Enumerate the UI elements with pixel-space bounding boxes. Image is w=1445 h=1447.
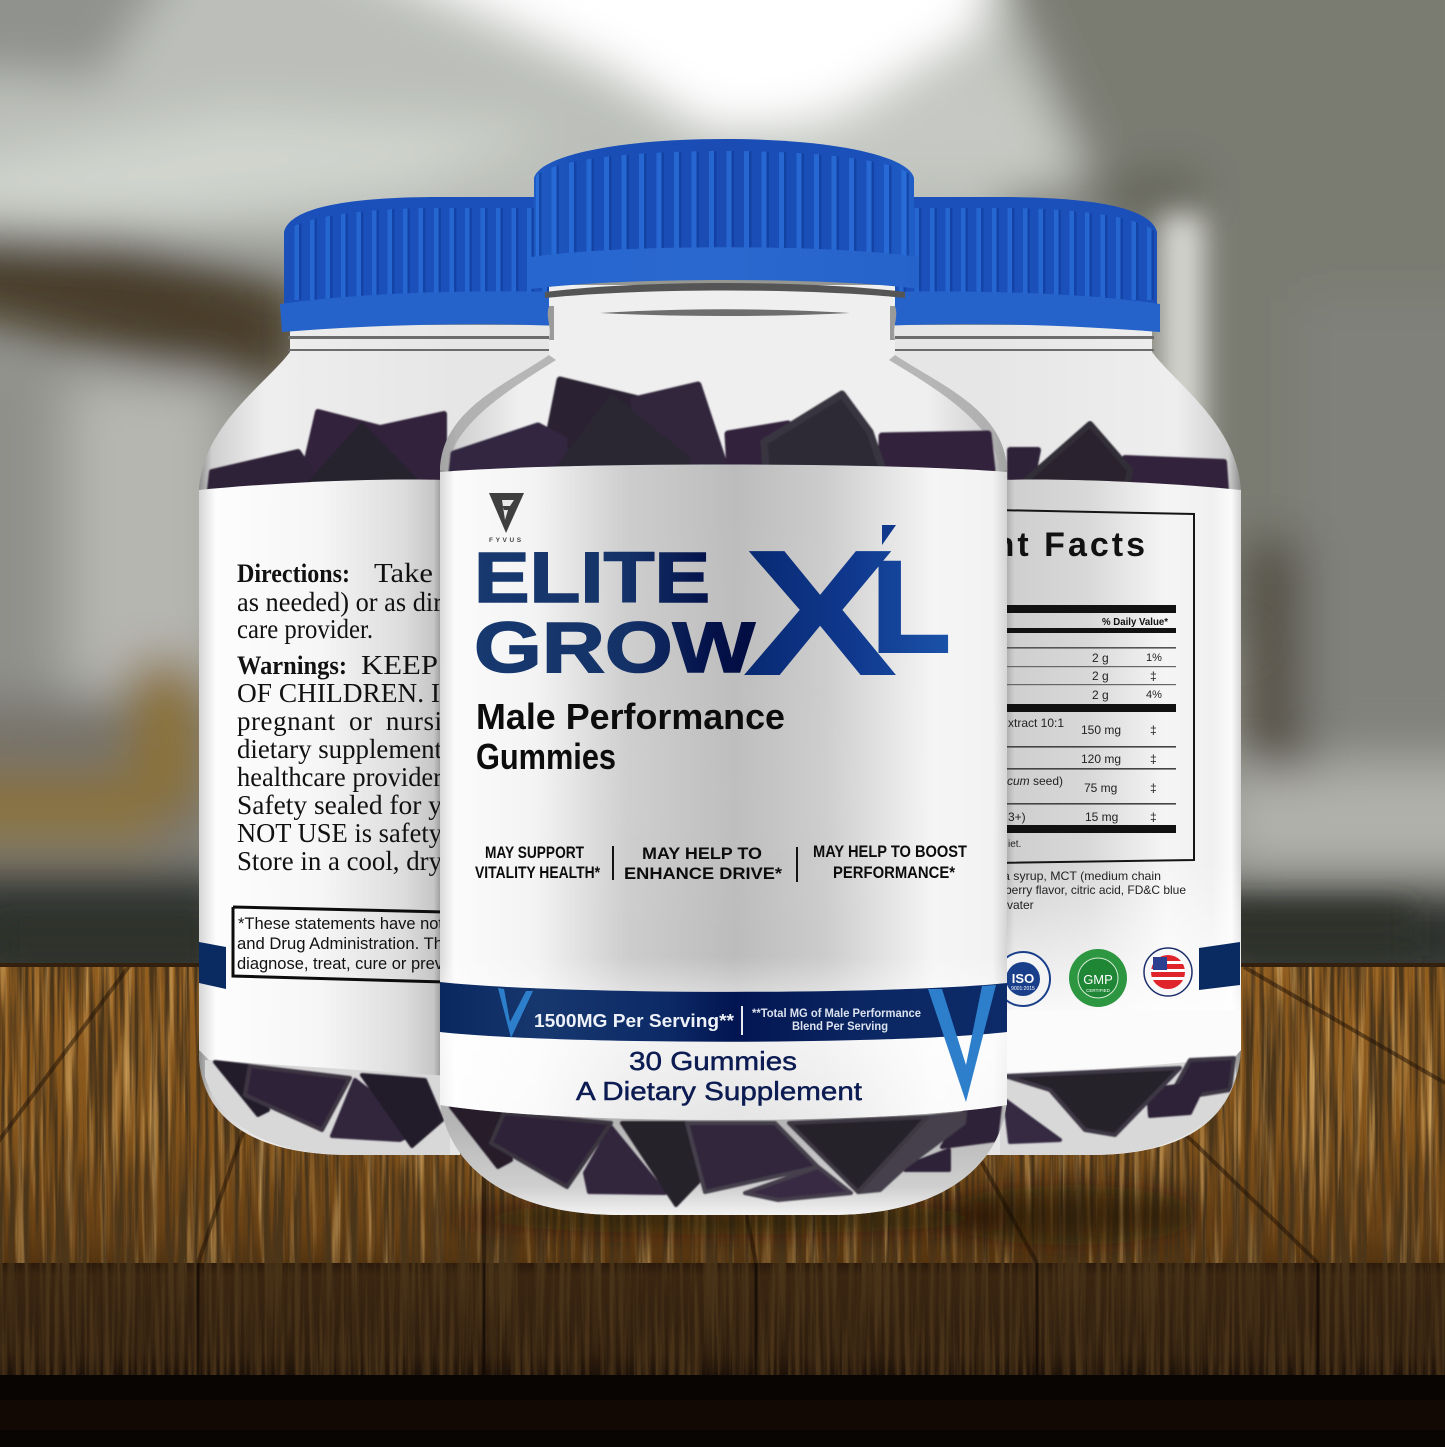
cap body with ribs [534, 139, 914, 262]
brand logo: FYVUS [489, 493, 524, 544]
left bottle label [199, 479, 445, 1078]
FDA disclaimer box [233, 907, 445, 982]
supplement facts panel: ‡ [1150, 669, 1157, 683]
FDA disclaimer box: and Drug Administration. Th [237, 934, 443, 953]
supplement facts panel: 2 g [1092, 651, 1109, 665]
supplement facts panel: ‡ [1150, 781, 1157, 795]
directions text: healthcare provider [237, 762, 442, 792]
claim: drive [624, 844, 782, 883]
supplement facts panel: 3+) [1008, 810, 1026, 824]
claim: vitality: MAY SUPPORT [485, 843, 584, 862]
claim: vitality [475, 843, 600, 882]
left blue stripe [199, 942, 226, 989]
blend note: Blend Per Serving [792, 1021, 888, 1033]
directions text: Safety sealed for y [237, 790, 443, 820]
badge: GMP certified: CERTIFIED [1086, 988, 1111, 993]
directions text: care provider. [237, 614, 373, 644]
center bottle gummies top [452, 380, 992, 472]
supplement facts panel: 150 mg [1081, 723, 1121, 737]
right bottle label [1000, 479, 1241, 1078]
directions text [237, 558, 443, 876]
right bottle gummies [1010, 424, 1226, 490]
badge: ISO certified [996, 952, 1050, 1006]
blend note: **Total MG of Male Performance [752, 1008, 921, 1020]
subtitle: Male Performance [476, 696, 785, 737]
product wordmark: Elite Grow XL: X [742, 513, 898, 714]
bottle: back left, directions [199, 197, 570, 1160]
blend note [752, 1008, 921, 1033]
claim: performance [813, 842, 968, 882]
supplement facts panel: 1% [1146, 652, 1162, 664]
supplement facts panel: ‡ [1150, 723, 1157, 737]
table underside shadow [0, 1375, 1445, 1447]
table front edge [0, 1263, 1445, 1375]
right bottle cap [880, 197, 1160, 332]
directions text: Warnings: [237, 651, 347, 680]
wooden table top [0, 963, 1445, 1264]
claim: drive: ENHANCE DRIVE* [624, 864, 782, 883]
left bottle cap [280, 197, 560, 332]
product wordmark: Elite Grow XL: ELITE [474, 539, 710, 618]
badge: GMP certified: GMP [1083, 972, 1113, 987]
directions text: pregnant or nursi [237, 706, 442, 736]
FDA disclaimer box: diagnose, treat, cure or prev [237, 954, 443, 973]
directions text: OF CHILDREN. I [237, 678, 440, 708]
subtitle: Gummies [476, 736, 616, 777]
center bottle glass [440, 285, 1007, 1215]
bottle: back right, supplement facts [875, 197, 1241, 1160]
ingredients text: berry flavor, citric acid, FD&C blue [1005, 883, 1186, 897]
left bottle lower gummies [205, 1060, 450, 1160]
supplement facts panel: % Daily Value* [1102, 617, 1168, 628]
count and dietary supplement [576, 1046, 863, 1106]
brand logo: FYVUS: FYVUS [489, 537, 524, 544]
supplement facts panel: cum seed) [1007, 774, 1063, 788]
product wordmark: Elite Grow XL [474, 513, 950, 714]
center bottle cap [531, 139, 919, 289]
supplement facts panel: xtract 10:1 [1008, 716, 1064, 730]
supplement facts panel: ‡ [1150, 752, 1157, 766]
supplement facts panel: 2 g [1092, 688, 1109, 702]
ingredients text: vater [1007, 898, 1034, 912]
supplement facts panel: 75 mg [1084, 781, 1117, 795]
supplement facts panel: 4% [1146, 689, 1162, 701]
ingredients text [1003, 869, 1186, 912]
directions text: Store in a cool, dry [237, 846, 442, 876]
claims row [475, 842, 968, 883]
product wordmark: Elite Grow XL: GROW [474, 609, 755, 688]
right chevron [928, 985, 996, 1102]
right bottle glass [875, 325, 1241, 1155]
directions text: as needed) or as dir [237, 587, 442, 617]
directions text: dietary supplement [237, 734, 442, 764]
claim: drive: MAY HELP TO [642, 844, 762, 863]
claim: vitality: VITALITY HEALTH* [475, 863, 600, 882]
blurred room background [0, 0, 1445, 1000]
count and dietary supplement: 30 Gummies [629, 1046, 797, 1076]
center bottle lower gummies [441, 1105, 1006, 1215]
directions text: Directions: [237, 559, 350, 588]
supplement facts panel: ‡ [1150, 810, 1157, 824]
facts title: nt Facts [994, 526, 1148, 564]
badge: ISO certified: 9001:2015 [1011, 986, 1035, 992]
right blue stripe [1199, 942, 1240, 990]
left chevron [498, 988, 533, 1038]
badge: ISO certified: ISO [1012, 971, 1034, 986]
supplement facts panel [994, 510, 1194, 863]
supplement facts panel: 120 mg [1081, 752, 1121, 766]
serving text: 1500MG Per Serving** [534, 1011, 734, 1031]
cap ring [531, 247, 919, 289]
directions text: NOT USE is safety [237, 818, 442, 848]
center bottle neck highlights [440, 283, 1007, 470]
supplement facts panel: iet. [1008, 839, 1021, 850]
directions text: Take [374, 558, 433, 588]
claim: performance: PERFORMANCE* [833, 863, 955, 882]
badge: GMP certified [1069, 949, 1127, 1007]
center bottle label [440, 464, 1007, 1120]
right bottle lower gummies [1000, 1058, 1241, 1160]
supplement facts panel: 2 g [1092, 669, 1109, 683]
subtitle [476, 696, 785, 777]
bottle: center front [430, 139, 1020, 1220]
supplement facts panel: 15 mg [1085, 810, 1118, 824]
FDA disclaimer box: *These statements have not [238, 914, 443, 933]
ingredients text: a syrup, MCT (medium chain [1003, 869, 1161, 883]
claim: performance: MAY HELP TO BOOST [813, 842, 968, 861]
left bottle glass [199, 325, 570, 1155]
count and dietary supplement: A Dietary Supplement [576, 1076, 863, 1106]
navy serving band [440, 982, 1007, 1102]
left bottle gummies [210, 412, 444, 490]
badge: made in USA [1144, 948, 1192, 996]
directions text: KEEP [361, 650, 438, 680]
product wordmark: Elite Grow XL: L [872, 536, 950, 679]
